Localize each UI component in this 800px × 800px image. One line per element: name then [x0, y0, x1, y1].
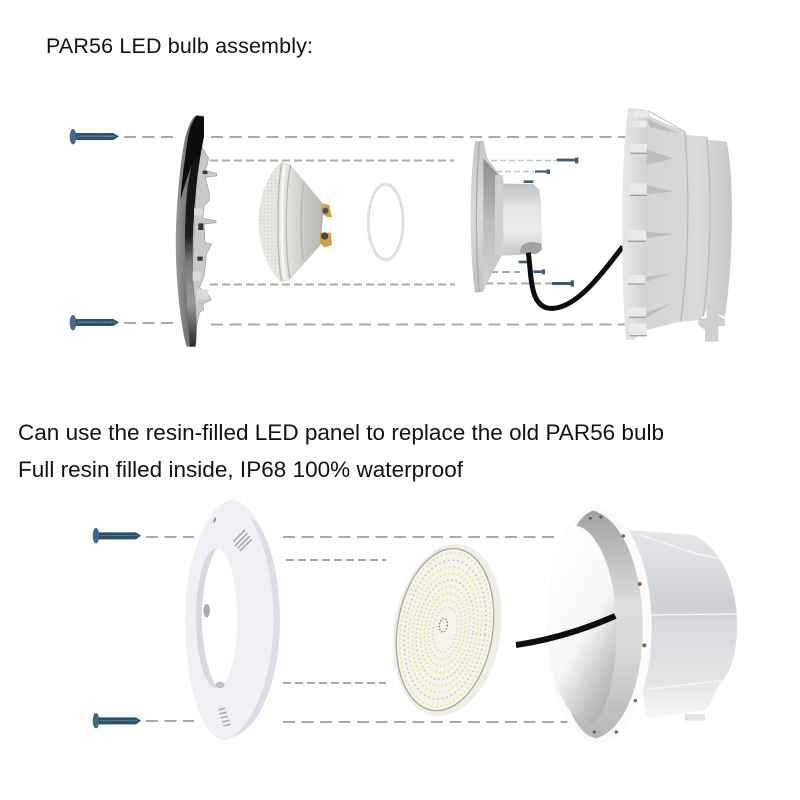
niche housing body	[547, 507, 737, 743]
front cover ring, side view	[176, 115, 217, 347]
housing cable fitting	[698, 305, 725, 342]
icon: top screw	[70, 129, 119, 144]
bulb terminals	[320, 203, 332, 247]
caption: resin-filled panel	[18, 420, 664, 482]
housing ribs and tabs	[627, 111, 678, 336]
diagram: PAR56 bulb assembly right half	[471, 108, 732, 342]
PAR56 LED bulb	[258, 162, 332, 282]
pool niche housing	[622, 108, 732, 342]
LED rings	[389, 546, 501, 713]
resin LED panel	[381, 536, 514, 724]
icon: upper screw	[93, 528, 141, 543]
back ribs	[190, 140, 217, 330]
icon: bottom screw	[70, 315, 119, 330]
dashed guide lines: resin panel	[146, 537, 568, 722]
flange	[547, 507, 652, 743]
dashed guide lines: PAR56	[124, 137, 625, 324]
rubber seal ring	[368, 184, 403, 260]
housing interior	[547, 526, 617, 723]
small screws	[519, 158, 578, 287]
cover vents	[218, 530, 252, 726]
caption: resin-filled panel: Full resin filled inside, IP68 100% waterproof	[18, 457, 464, 482]
diagram: PAR56 bulb assembly left half	[70, 115, 403, 347]
icon: lower screw	[93, 713, 141, 728]
bulb niche adapter	[471, 141, 542, 293]
diagram: resin LED panel and housing	[381, 507, 737, 743]
black cable	[516, 616, 615, 645]
diagram: resin panel cover and screws	[93, 500, 280, 740]
caption: resin-filled panel: Can use the resin-filled LED panel to replace the old PAR56 bulb	[18, 420, 664, 445]
black cable	[528, 247, 623, 308]
flange screw holes	[593, 515, 646, 734]
heading: PAR56 assembly: PAR56 LED bulb assembly:	[46, 34, 313, 58]
white cover ring	[185, 500, 280, 740]
